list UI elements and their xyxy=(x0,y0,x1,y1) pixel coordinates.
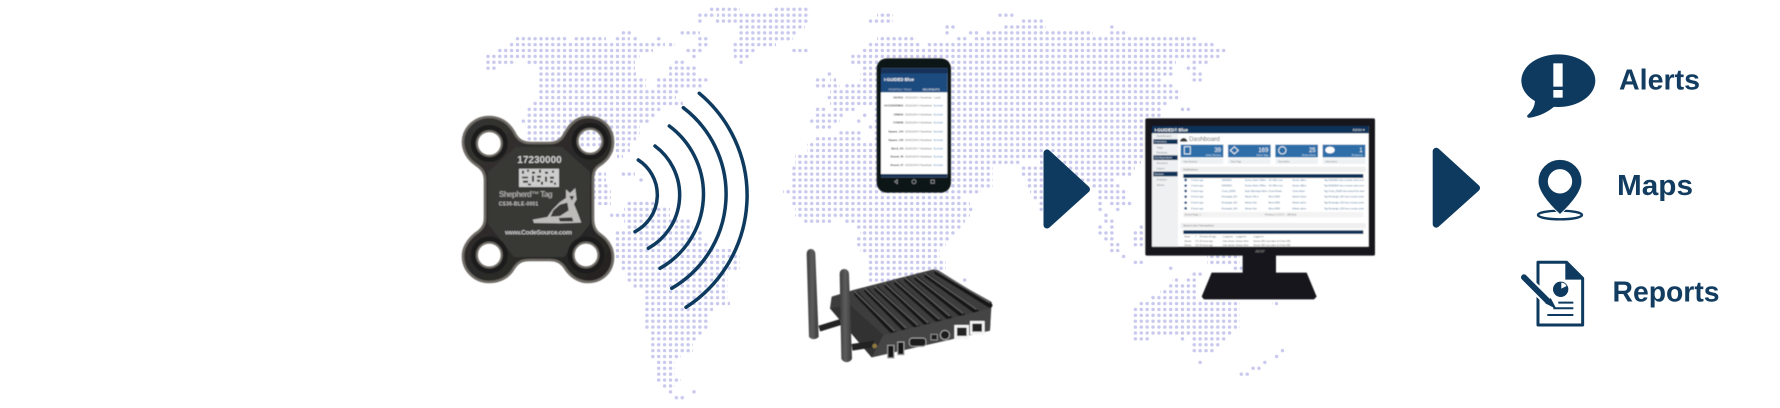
icon: alert speech bubble xyxy=(1521,54,1595,118)
notifications table: US Office test xyxy=(1268,179,1283,182)
notifications table: Device offline xyxy=(1292,186,1307,188)
gateway front panel xyxy=(872,308,991,357)
gateway ethernet ports xyxy=(954,325,969,339)
dashboard sidebar: Screen xyxy=(1154,172,1164,176)
gateway HDMI port xyxy=(909,338,926,346)
monitor brand: acer xyxy=(1255,249,1265,255)
recent transactions table: Device xyxy=(1184,245,1192,247)
desktop monitor showing dashboard: 1 xyxy=(1359,148,1363,154)
phone app list: Heartbeat xyxy=(920,146,932,150)
notifications table: Device Alarm Offline xyxy=(1245,185,1267,188)
notifications table: Tag Rectangle_001 has a muster point xyxy=(1324,196,1364,199)
phone app list: Heartbeat xyxy=(920,112,932,116)
desktop monitor showing dashboard: 169 xyxy=(1258,148,1269,154)
notifications table: Micro-DMS xyxy=(1268,196,1280,199)
tag serial number: 17230000 xyxy=(517,155,562,166)
tag website: www.CodeSource.com xyxy=(504,230,572,236)
phone app list: 20191204-7 xyxy=(905,146,920,150)
phone app list: Local xyxy=(934,95,941,99)
hole rims and lobes xyxy=(473,125,606,271)
rear antenna xyxy=(807,249,819,339)
phone app list: 20191204-6 xyxy=(905,138,920,142)
desktop monitor showing dashboard: I-GUIDED® Blue xyxy=(1155,127,1189,132)
desktop monitor showing dashboard: Muster Alerts xyxy=(1302,154,1316,157)
tag part number: CS36-BLE-0001 xyxy=(499,201,538,207)
notifications table: Cross Alarm xyxy=(1292,190,1305,193)
tag dog engraving xyxy=(533,188,581,223)
phone app list: USMAR xyxy=(894,112,903,116)
notifications table: Tag Rectangle_002 has a muster point xyxy=(1324,202,1364,205)
phone app list: Survival xyxy=(933,129,943,133)
phone app list: Heartbeat xyxy=(920,121,932,125)
dashboard sidebar: Dashboard xyxy=(1157,134,1172,138)
gateway heat-sink fins xyxy=(855,270,990,334)
recent transactions table: Logged In xyxy=(1236,237,1247,239)
dashboard sidebar: Sensors xyxy=(1157,161,1168,165)
notifications table: Muster active xyxy=(1292,202,1307,205)
recent transactions table: Device 000 Low value of 0 from 000 xyxy=(1253,240,1291,243)
phone app tabs: POINTS/LY TAGS xyxy=(889,87,912,91)
notifications table: Rectangle_003 xyxy=(1222,207,1238,210)
phone app list: 20191204-2 xyxy=(905,104,920,108)
phone app list: 20191204-4 xyxy=(905,121,920,125)
recent transactions table: 171 xyxy=(1195,241,1200,243)
recent transactions table: 142 xyxy=(1195,245,1200,247)
label: alerts: Alerts xyxy=(1619,64,1700,96)
label: reports: Reports xyxy=(1612,276,1720,308)
notifications table: Micro-DMS xyxy=(1268,207,1280,210)
notifications table: Tag 00000001 has a muster point error xyxy=(1324,179,1364,182)
phone app list xyxy=(884,95,943,167)
recent transactions table: Device Alert xyxy=(1236,244,1249,247)
phone app list: Survival xyxy=(933,104,943,108)
phone app list: Round_47 xyxy=(890,163,904,167)
recent transactions table: User device xyxy=(1223,240,1236,243)
notifications table: Muster-Ack xyxy=(1245,207,1258,210)
gateway small ports xyxy=(931,334,937,340)
recent transactions table: Device xyxy=(1184,241,1192,243)
front antenna xyxy=(852,344,874,347)
desktop monitor showing dashboard: View Devices xyxy=(1183,161,1198,163)
output: alerts xyxy=(1521,54,1700,118)
phone screen xyxy=(881,68,947,177)
notifications table: Device Alarm Offline xyxy=(1245,179,1267,182)
recent transactions table: User device xyxy=(1223,244,1236,247)
phone app bar xyxy=(881,68,947,92)
icon: map location pin xyxy=(1538,159,1582,219)
notifications table: 5 hours ago xyxy=(1191,190,1204,193)
IoT gateway with antennas xyxy=(807,249,992,362)
desktop monitor showing dashboard: Admin ▾ xyxy=(1353,128,1365,132)
smartphone with recipients app: RECIPIENTS xyxy=(923,87,940,91)
notifications table: 00000001 xyxy=(1222,180,1233,182)
phone app list: Round_46 xyxy=(890,155,904,159)
desktop monitor showing dashboard: Active Tags xyxy=(1256,154,1269,157)
monitor stand xyxy=(1202,253,1317,299)
phone app list: Survival xyxy=(933,138,943,142)
phone app list: 20191204-5 xyxy=(905,129,920,133)
arrow: dashboard to outputs xyxy=(1436,151,1476,224)
dashboard title xyxy=(1180,138,1187,142)
phone app list: 20191204-3 xyxy=(905,112,920,116)
notifications table: Previous 1 2 3 4 5 ... 335 Next xyxy=(1265,214,1297,217)
label: maps: Maps xyxy=(1617,170,1693,202)
phone app list: Survival xyxy=(933,163,943,167)
phone app list: Heartbeat xyxy=(920,163,932,167)
notifications table: Tag Cross_00000 has entered the area xyxy=(1324,190,1365,193)
recent transactions table: Read xyxy=(1184,237,1191,239)
recent transactions table: 15 hours 00 ago xyxy=(1199,236,1217,239)
notifications table: Notifications xyxy=(1183,167,1198,171)
screen background xyxy=(1152,126,1369,247)
Shepherd tag device xyxy=(463,117,613,282)
notifications table: 8 hours ago xyxy=(1191,196,1204,199)
recent transactions table: 16 hours ago xyxy=(1199,240,1214,243)
notifications table: Cross_00000 xyxy=(1222,190,1236,193)
phone app list: Square_155 xyxy=(888,138,904,142)
notifications table: 4 hours ago xyxy=(1191,179,1204,182)
desktop monitor showing dashboard xyxy=(1145,118,1375,299)
recent transactions table xyxy=(1181,223,1366,247)
dashboard sidebar: Alerts xyxy=(1157,183,1165,187)
phone body xyxy=(877,58,951,193)
phone app list: ACCESSORIES xyxy=(884,104,904,108)
notifications table: Cross Roads xyxy=(1268,190,1283,193)
notifications table: Device offline xyxy=(1292,180,1307,182)
gateway chassis xyxy=(830,269,992,357)
icon: report document with pen xyxy=(1524,261,1584,325)
dotted world map background xyxy=(487,9,1282,398)
dashboard sidebar: Users xyxy=(1157,166,1165,170)
phone app list: 20191204-9 xyxy=(905,163,920,167)
notifications table: 00000002 xyxy=(1222,186,1233,188)
notifications table: Muster active xyxy=(1292,207,1307,210)
recent transactions table: Device 000 Low value of 0 from 000 xyxy=(1253,244,1291,247)
notifications table: Muster Off-or xyxy=(1245,196,1259,199)
tag centre plate xyxy=(488,147,590,257)
screen header bar xyxy=(1152,126,1369,133)
dashboard stat cards xyxy=(1181,145,1365,157)
tag data matrix code xyxy=(519,169,559,187)
output: reports xyxy=(1524,261,1720,325)
phone app list: 20191204-1 xyxy=(905,95,920,99)
recent transactions table: Logged In xyxy=(1253,237,1264,239)
phone app title: I-GUIDED Blue xyxy=(884,77,915,82)
arrow: gateway to dashboard xyxy=(1047,153,1086,225)
notifications table: Muster Active xyxy=(1292,196,1307,199)
notifications table: 8 hours ago xyxy=(1191,202,1204,205)
notifications table: Tag Rectangle_003 has a muster point xyxy=(1324,207,1364,210)
tag product name: Shepherd™ Tag xyxy=(499,190,553,199)
desktop monitor showing dashboard: Recipients xyxy=(1352,154,1363,157)
gateway USB ports xyxy=(888,342,904,358)
dashboard sidebar: Devices xyxy=(1157,150,1168,154)
dashboard sidebar: Custom xyxy=(1157,178,1167,182)
notifications table: Micro-DMS xyxy=(1268,202,1280,205)
desktop monitor showing dashboard: 39 xyxy=(1214,148,1222,154)
phone app list: Heartbeat xyxy=(920,104,932,108)
phone app list: Heartbeat xyxy=(920,129,932,133)
phone app list: Heartbeat xyxy=(920,138,932,142)
phone navigation buttons xyxy=(895,180,934,184)
desktop monitor showing dashboard: View Alerts xyxy=(1278,160,1290,163)
phone app list: FUSION xyxy=(893,121,903,125)
recent transactions table: Device Alert xyxy=(1236,240,1249,243)
dashboard sidebar xyxy=(1152,133,1178,247)
notifications table xyxy=(1181,167,1366,217)
monitor frame xyxy=(1145,118,1375,256)
phone app list: Square_154 xyxy=(888,129,904,133)
output: maps xyxy=(1538,159,1693,219)
recent transactions table: Recent User Transactions xyxy=(1183,224,1215,228)
smartphone with recipients app xyxy=(877,58,951,193)
desktop monitor showing dashboard: Dashboard xyxy=(1189,136,1220,143)
tag body with mounting holes xyxy=(463,117,613,282)
desktop monitor showing dashboard: Active Devices xyxy=(1206,154,1222,157)
phone app list: Survival xyxy=(933,121,943,125)
desktop monitor showing dashboard: View Users xyxy=(1325,160,1338,163)
gateway side face xyxy=(830,305,885,357)
notifications table: Rectangle_002 xyxy=(1222,202,1238,205)
phone app list: Block_D3 xyxy=(891,146,904,150)
dashboard sidebar: Tags xyxy=(1157,145,1163,149)
notifications table: Muster-Ack xyxy=(1245,202,1258,205)
phone app list: 20191204-8 xyxy=(905,155,920,159)
notifications table: Rectangle_001 xyxy=(1222,196,1238,199)
dashboard sidebar: Configuration xyxy=(1154,156,1172,160)
phone app list: Heartbeat xyxy=(920,95,932,99)
recent transactions table: Longpoint xyxy=(1223,236,1233,239)
notifications table: US Office test xyxy=(1268,185,1283,188)
recent transactions table: 16 hours ago xyxy=(1199,244,1214,247)
phone app list: Heartbeat xyxy=(920,155,932,159)
dashboard sidebar: Inventory xyxy=(1154,140,1167,144)
notifications table: 4 hours ago xyxy=(1191,185,1204,188)
notifications table: Tag 00000002 has a muster point error xyxy=(1324,185,1364,188)
phone app list: DEVICE xyxy=(893,95,904,99)
desktop monitor showing dashboard: View Tags xyxy=(1231,161,1242,163)
wireless signal arcs xyxy=(635,93,747,307)
phone app list: Survival xyxy=(933,112,943,116)
desktop monitor showing dashboard: 25 xyxy=(1309,148,1316,154)
recent transactions table: 7 xyxy=(1195,237,1197,239)
phone app list: Survival xyxy=(933,155,943,159)
notifications table: Current Page: 1 xyxy=(1184,214,1201,217)
phone app list: Survival xyxy=(933,146,943,150)
notifications table: 8 hours ago xyxy=(1191,207,1204,210)
notifications table: Early Warnings Alarm xyxy=(1245,190,1267,193)
